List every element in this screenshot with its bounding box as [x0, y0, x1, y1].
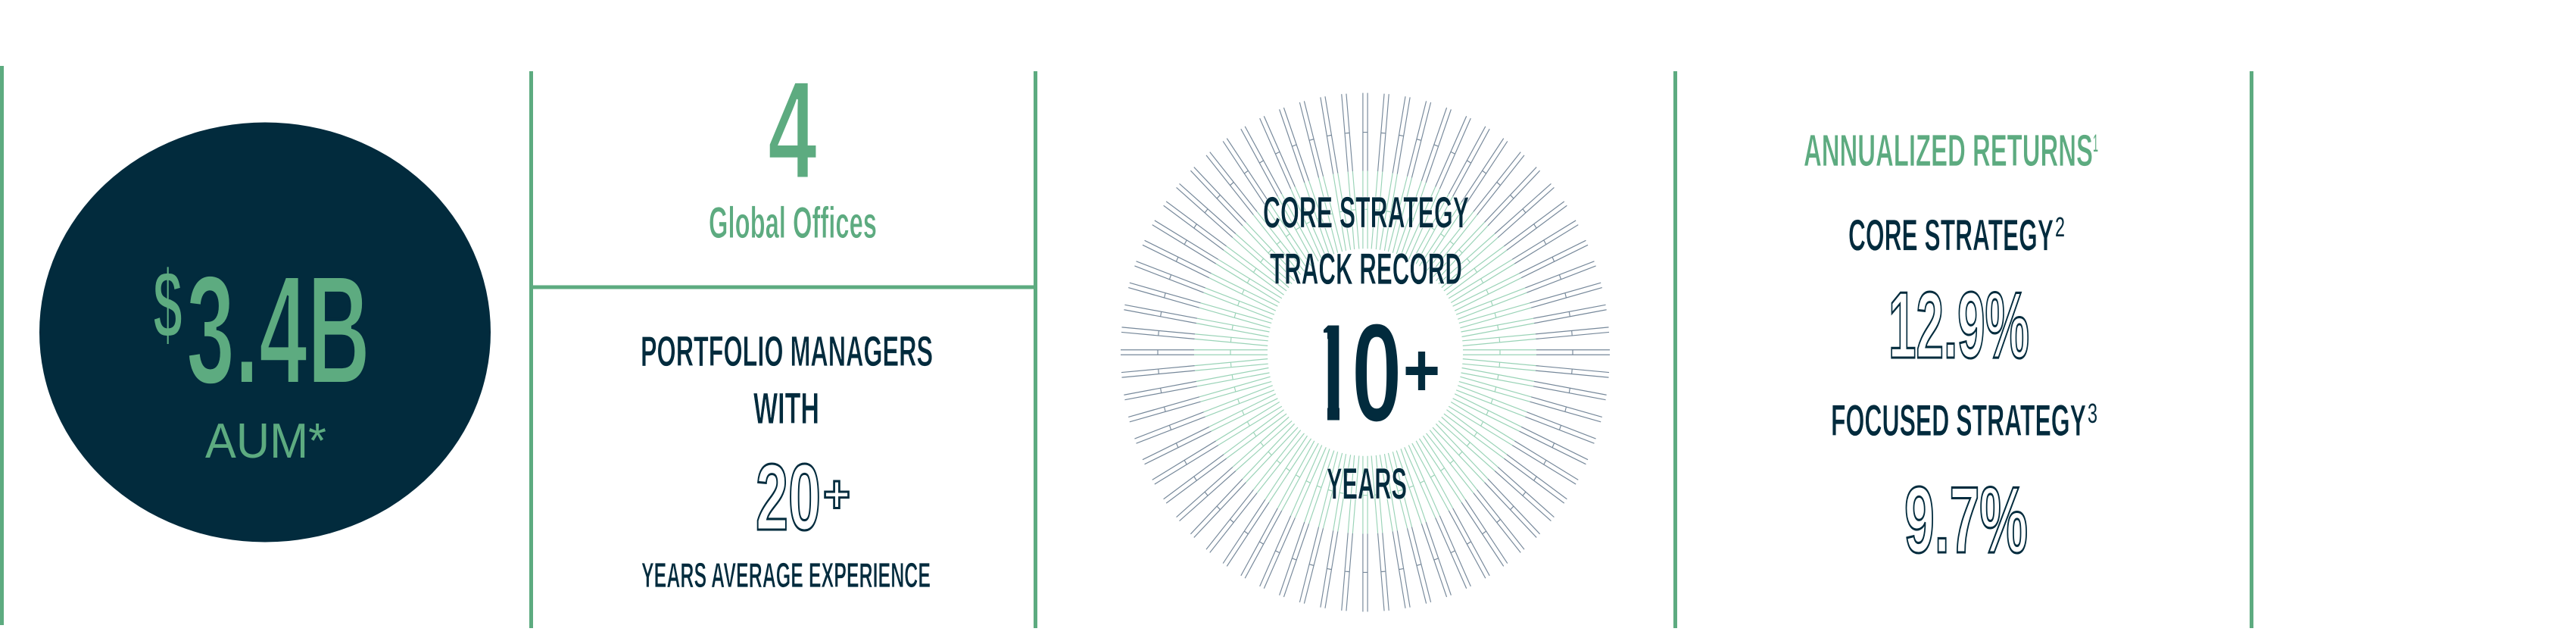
panel: portfolio managers [641, 327, 933, 595]
focused strategy return: 9.7% [1904, 468, 2028, 573]
panel: annualized returns [1804, 126, 2098, 573]
experience plus: + [823, 464, 850, 524]
panel: track record [1121, 93, 1610, 611]
focused strategy label: FOCUSED STRATEGY [1831, 396, 2086, 446]
radial sunburst [1121, 93, 1610, 611]
focused footnote mark: 3 [2088, 398, 2097, 429]
track record plus: + [1403, 328, 1440, 413]
track record heading line two: TRACK RECORD [1270, 245, 1462, 294]
returns heading: ANNUALIZED RETURNS [1804, 126, 2093, 176]
core footnote mark: 2 [2055, 211, 2065, 242]
dollar sign: $ [153, 251, 182, 359]
track record heading line one: CORE STRATEGY [1263, 188, 1469, 238]
track record label: YEARS [1327, 459, 1407, 509]
panel: global offices [709, 52, 877, 248]
offices label: Global Offices [709, 199, 877, 248]
dark circle [39, 123, 491, 543]
core strategy return: 12.9% [1888, 274, 2029, 378]
experience label: YEARS AVERAGE EXPERIENCE [641, 555, 931, 595]
panel: AUM [39, 123, 491, 543]
track record number: 10 [1305, 295, 1402, 452]
text: 1 [2093, 130, 2098, 157]
AUM label: AUM* [205, 413, 326, 468]
managers heading line two: WITH [753, 384, 819, 433]
managers heading line one: PORTFOLIO MANAGERS [641, 327, 933, 376]
offices number: 4 [768, 52, 817, 208]
AUM value: 3.4B [186, 243, 370, 417]
core strategy label: CORE STRATEGY [1848, 211, 2054, 261]
experience number: 20 [756, 446, 821, 550]
